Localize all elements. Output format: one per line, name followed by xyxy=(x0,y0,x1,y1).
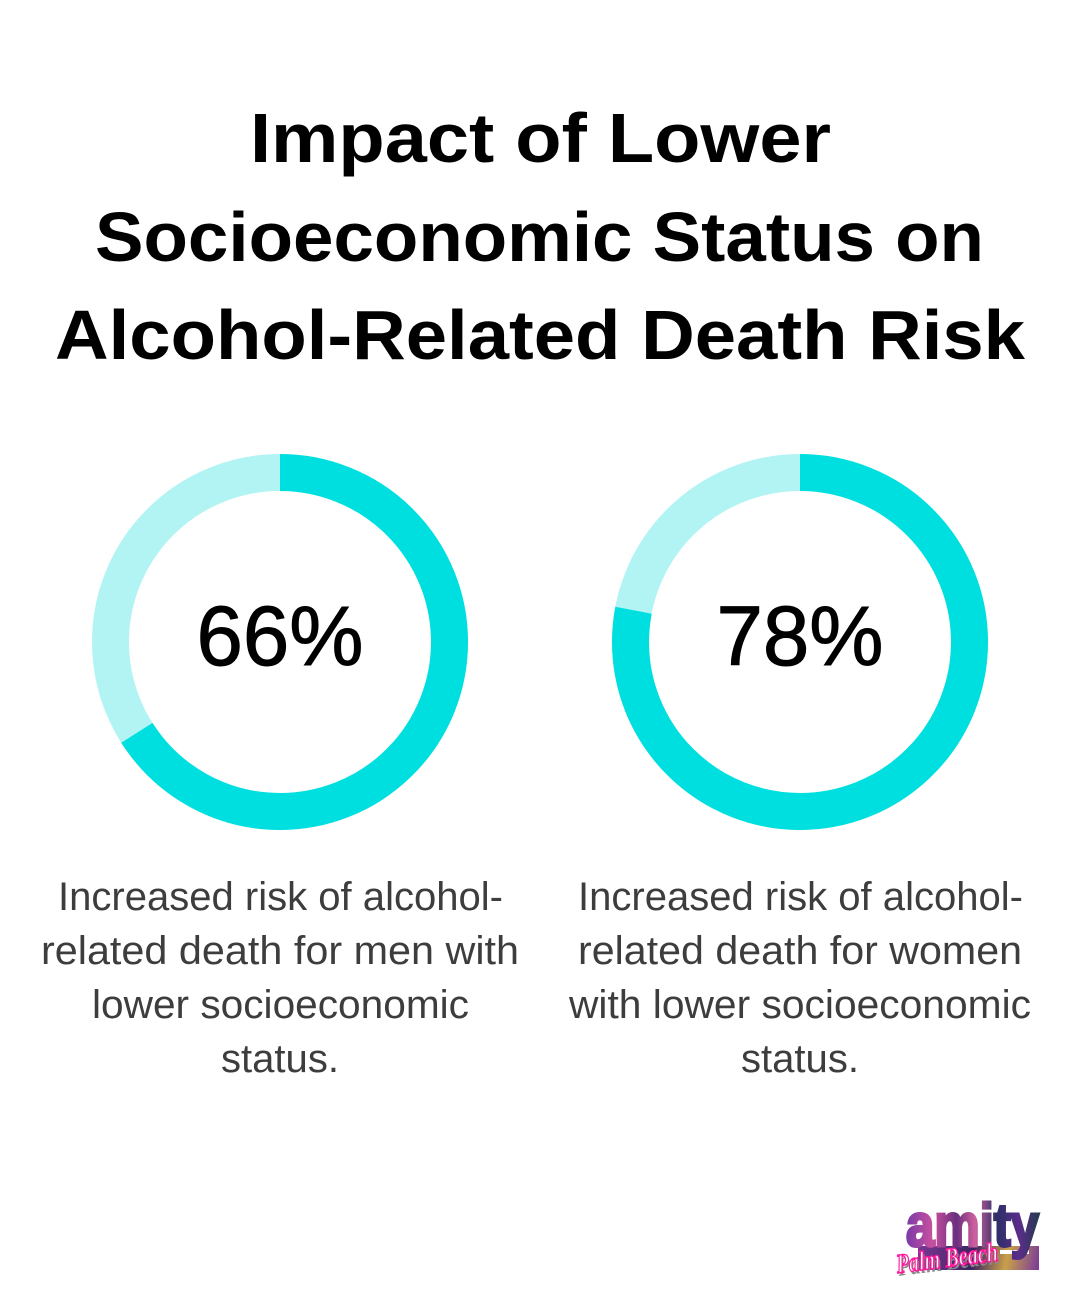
description: men: lower socioeconomic xyxy=(92,983,469,1027)
description: men xyxy=(41,875,519,1081)
logo: Amity Palm Beach: Palm Beach xyxy=(895,1240,1001,1282)
logo: Amity Palm Beach xyxy=(894,1192,1040,1282)
title: Impact of Lower xyxy=(250,99,831,177)
title: Socioeconomic Status on xyxy=(95,198,984,276)
panel: men statistic xyxy=(41,472,519,1081)
panel: women statistic xyxy=(568,472,1031,1081)
description: women: with lower socioeconomic xyxy=(568,983,1031,1027)
description: women: Increased risk of alcohol- xyxy=(578,875,1023,919)
donut chart: 78% xyxy=(630,472,970,812)
description: women xyxy=(568,875,1031,1081)
title: Alcohol-Related Death Risk xyxy=(55,296,1025,374)
description: men: related death for men with xyxy=(41,929,519,973)
value: 78%: 78% xyxy=(716,589,884,683)
description: women: status. xyxy=(741,1037,859,1081)
description: men: Increased risk of alcohol- xyxy=(58,875,503,919)
donut chart: 66% xyxy=(110,472,450,812)
value: 66%: 66% xyxy=(196,589,364,683)
logo: Amity Palm Beach: amity xyxy=(906,1192,1040,1259)
description: men: status. xyxy=(221,1037,339,1081)
description: women: related death for women xyxy=(578,929,1022,973)
title xyxy=(55,99,1025,374)
logo: Amity Palm Beach: Palm Beach xyxy=(894,1237,999,1279)
